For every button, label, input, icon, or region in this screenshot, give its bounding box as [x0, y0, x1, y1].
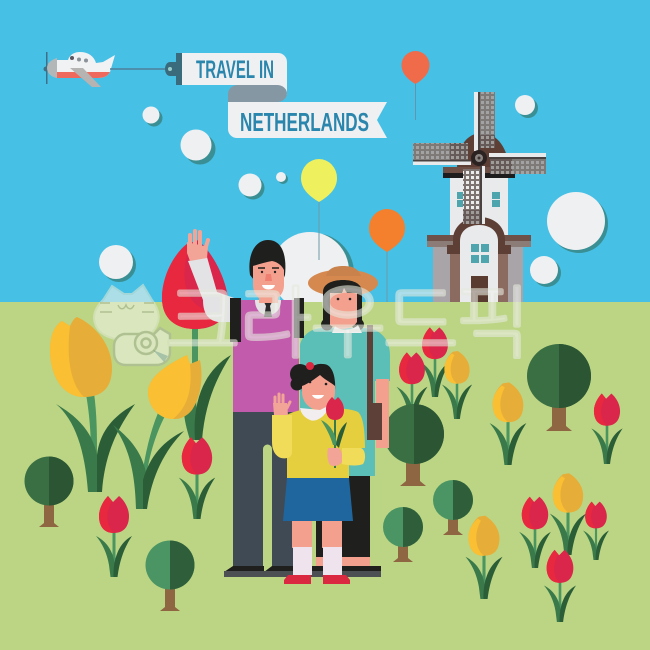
small tulips — [96, 327, 623, 622]
large red tulip — [153, 240, 231, 440]
man — [187, 231, 304, 566]
ground shadow under family — [224, 566, 381, 577]
watermark camera — [114, 328, 170, 365]
large yellow tulip right — [113, 355, 201, 509]
girl collar — [300, 406, 328, 421]
bubbles in the sky — [99, 95, 608, 313]
balloon: red-orange — [402, 51, 430, 120]
watermark cat — [94, 285, 159, 340]
windmill base — [427, 217, 531, 302]
woman legs — [316, 470, 370, 557]
man vest — [233, 300, 299, 412]
girl waving arm — [272, 394, 292, 458]
woman hat — [308, 266, 378, 296]
man hand — [187, 231, 208, 261]
girl skirt — [283, 478, 353, 521]
windmill sails — [413, 92, 546, 224]
girl head — [290, 362, 335, 410]
girl legs and socks — [292, 521, 342, 575]
tower windows — [457, 192, 500, 207]
girl sweater — [287, 408, 365, 478]
girl hand — [273, 394, 290, 415]
windmill — [413, 92, 546, 302]
grass field — [0, 302, 650, 650]
watermark logo and text — [94, 279, 530, 367]
woman head — [321, 280, 364, 333]
backpack straps — [230, 298, 304, 342]
large yellow tulip left — [50, 317, 135, 492]
balloon: orange — [369, 209, 405, 305]
windmill cap — [443, 133, 515, 178]
girl shoes — [284, 575, 350, 584]
windmill tower — [450, 175, 508, 240]
balloon: yellow — [301, 159, 337, 260]
trees — [24, 344, 591, 611]
man raised arm — [187, 231, 240, 322]
watermark text: 크라우드픽 — [166, 279, 530, 367]
man trousers — [233, 412, 298, 566]
woman arm and bag — [367, 325, 389, 448]
airplane — [44, 52, 115, 87]
banner: travel in — [165, 53, 287, 95]
woman — [300, 266, 390, 566]
sky background — [0, 0, 650, 303]
tow rope — [110, 68, 166, 70]
banner fold — [228, 85, 287, 102]
banner: travel in: TRAVEL IN — [196, 56, 274, 84]
banner: netherlands — [228, 102, 387, 138]
woman torso — [300, 328, 390, 476]
man collar and tie — [255, 300, 281, 317]
girl holding tulip — [321, 397, 365, 468]
girl — [272, 362, 365, 584]
man head — [249, 240, 285, 303]
banner: netherlands: NETHERLANDS — [240, 107, 369, 137]
